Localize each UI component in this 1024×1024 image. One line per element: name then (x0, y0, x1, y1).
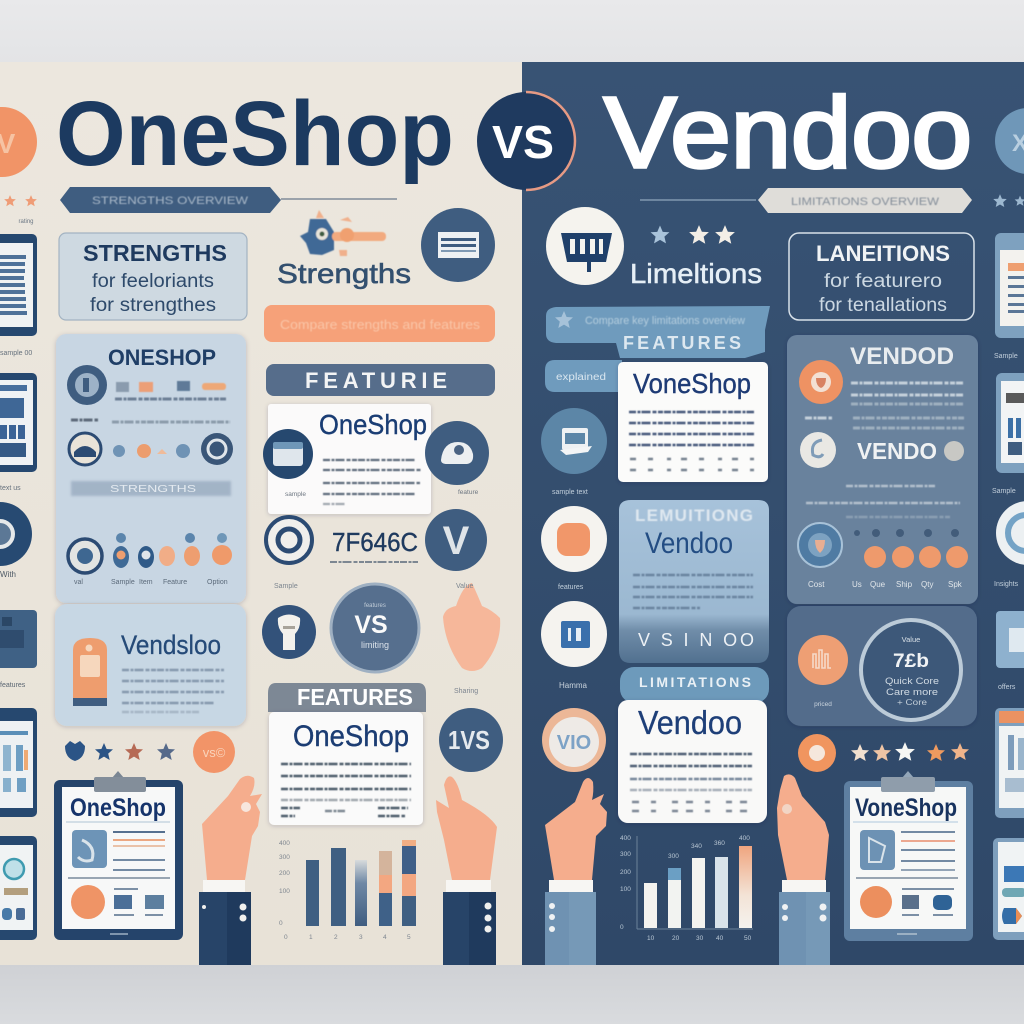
bar chart: Vendoo: 0 (620, 924, 624, 931)
icon: VIO ring (542, 708, 606, 772)
thumbnail (72, 830, 107, 868)
bar chart: OneShop: 100 (279, 888, 290, 895)
phone 4 (995, 708, 1024, 818)
small label: features (558, 584, 584, 591)
icon: VIO ring: VIO (557, 732, 591, 754)
feature card: Vendoo (618, 700, 767, 823)
icon: orange hand circle (798, 635, 848, 685)
stat ring (861, 620, 961, 720)
bar chart: Vendoo: 300 (668, 853, 679, 860)
thumbnail (860, 830, 895, 870)
phone 3 (996, 611, 1024, 668)
phone 5 (993, 838, 1024, 940)
feature card: OneShop (268, 404, 431, 514)
axis labels: Feature (163, 579, 187, 586)
axis labels: Option (207, 579, 228, 586)
limitations box: for tenallations (819, 295, 947, 316)
features heading bar (268, 683, 426, 712)
pin row (113, 533, 232, 568)
small label: Hamma (559, 681, 588, 690)
panel: Vendoo stat (787, 606, 977, 726)
phone label 4: features (0, 682, 26, 689)
phone label 1: sample 00 (0, 350, 32, 357)
bar chart: Vendoo: 100 (620, 886, 631, 893)
bar chart: OneShop: 3 (359, 934, 363, 941)
orange banner (264, 305, 495, 342)
bar chart: Vendoo: 10 (647, 935, 655, 942)
bar chart: Vendoo: 50 (744, 935, 752, 942)
divider band: STRENGTHS (110, 484, 196, 495)
hand: left blue sleeve (545, 778, 607, 965)
icon: document circle (421, 208, 495, 282)
phone 1 (995, 233, 1024, 338)
stat ring: Quick Core (885, 676, 939, 686)
ring icon (0, 502, 32, 566)
icon: orange badge left edge (0, 107, 37, 177)
bar chart: OneShop: 0 (279, 920, 283, 927)
phone 5 (0, 708, 37, 817)
mini icon row (71, 381, 230, 422)
icon: circle C (201, 433, 233, 465)
bar chart: OneShop (279, 840, 416, 941)
bar chart: OneShop: 300 (279, 854, 290, 861)
panel: limitations blue (619, 500, 769, 663)
feature card: VoneShop (618, 362, 768, 482)
stat ring: Value (902, 635, 920, 644)
clipboard: OneShop (54, 771, 183, 940)
strengths box: for strengthes (90, 295, 216, 316)
icon: small badge (944, 441, 964, 461)
feature card: OneShop: OneShop (319, 409, 427, 440)
phone 4 (0, 610, 37, 668)
mini tiles (902, 888, 954, 916)
panel: OneShop side background (0, 62, 522, 965)
feature banner (266, 364, 495, 396)
subtitle pill: Vendoo: LIMITATIONS OVERVIEW (791, 196, 940, 208)
axis labels: Sample (111, 579, 135, 586)
icon: V circle: V (443, 519, 470, 563)
icon: raised hand (443, 583, 500, 671)
icon: white circle blue square (541, 601, 607, 667)
small label: sample text (552, 489, 588, 496)
phone label 4: offers (998, 684, 1016, 691)
ring icon (996, 501, 1024, 565)
panel axis labels: Ship (896, 580, 913, 589)
phone label 1: Sample (994, 353, 1018, 360)
small labels top of hand (274, 583, 478, 695)
bar chart: Vendoo: 400 (620, 835, 631, 842)
bar chart: OneShop: 400 (279, 840, 290, 847)
orange dot row (864, 546, 968, 568)
panel: Vendod detail (787, 335, 978, 604)
icon: V circle (425, 509, 487, 571)
panel axis labels: Cost (808, 580, 825, 589)
icon: strengths gear and key (300, 210, 386, 256)
icon: 1VS circle: 1VS (448, 725, 490, 755)
feature banner: FEATURIE (305, 368, 447, 393)
blue ribbon banner: Compare key limitations overview (585, 315, 745, 327)
bar chart: Vendoo: 20 (672, 935, 680, 942)
feature card: OneShop lower: OneShop (293, 720, 409, 753)
small label: features (285, 489, 479, 498)
bar chart: Vendoo: 200 (620, 869, 631, 876)
divider band (71, 481, 231, 496)
orange banner: Compare strengths and features (280, 317, 481, 332)
feature card: Vendoo: Vendoo (638, 704, 742, 741)
icon: small orange stars left edge (4, 195, 37, 225)
icon: ring logo (266, 517, 312, 563)
icon: circle B (69, 433, 101, 465)
hand holding card: right navy (436, 776, 497, 965)
icon: 1VS circle (439, 708, 503, 772)
blue ribbon banner (546, 306, 770, 358)
icon: circle D (68, 539, 102, 573)
panel axis labels: Us (852, 580, 862, 589)
bar chart: OneShop: 2 (334, 934, 338, 941)
axis labels: val (74, 579, 83, 586)
icon: shoe circle (425, 421, 489, 485)
title: OneShop: OneShop (56, 83, 454, 185)
strengths box (59, 233, 247, 320)
stat ring: 7£b (893, 651, 929, 672)
phone label 2: Sample (992, 488, 1016, 495)
subtitle pill: OneShop (60, 187, 397, 213)
icon: orange blob (193, 731, 235, 773)
small labels top of hand: Sample (274, 583, 298, 590)
bar chart: OneShop: 0 (284, 934, 288, 941)
icon: bulb circle (262, 605, 316, 659)
panel: Vendsloo (55, 604, 246, 726)
limitations box (789, 233, 974, 320)
icon: white swirl circle (800, 432, 836, 468)
strengths box: STRENGTHS (83, 240, 227, 266)
bar chart: OneShop: 5 (407, 934, 411, 941)
panel: Vendoo stat: priced (814, 701, 832, 708)
icon: orange swirl coin (798, 734, 836, 772)
small label: features: feature (458, 489, 479, 496)
VS centre badge: VS (492, 116, 554, 168)
hex colour label: 7F646C (332, 527, 418, 557)
feature card: VoneShop: VoneShop (633, 368, 751, 399)
small labels top of hand: Value (456, 583, 473, 590)
side cards: left edge (0, 234, 37, 940)
bar chart: OneShop: 4 (383, 934, 387, 941)
small blue pill: explained (556, 372, 606, 383)
icon: white circle orange blob (541, 506, 607, 572)
logo circle (71, 885, 105, 919)
limitations box: for featurero (824, 271, 942, 292)
logo circle (860, 886, 892, 918)
small blue pill (545, 360, 622, 392)
icon: blue shield circle (798, 523, 842, 567)
axis labels (74, 579, 228, 586)
axis labels: Item (139, 579, 153, 586)
bar chart: Vendoo (620, 835, 753, 942)
icon: small orange stars left edge: rating (18, 219, 34, 225)
icon: laptop circle (541, 408, 607, 474)
stat ring: Care more (886, 687, 938, 697)
stat ring: + Core (897, 698, 928, 707)
panel axis labels (808, 580, 963, 589)
clipboard: VoneShop (844, 771, 973, 941)
clipboard: VoneShop: VoneShop (855, 794, 957, 822)
panel: Vendsloo: Vendsloo (121, 630, 221, 660)
small labels top of hand: Sharing (454, 688, 478, 695)
bar chart: OneShop: 1 (309, 934, 313, 941)
bar chart: Vendoo: 400 (739, 835, 750, 842)
panel: Vendoo side background (522, 62, 1024, 965)
panel: OneShop detail: ONESHOP (108, 345, 216, 370)
panel: limitations blue: V S I N OO (638, 630, 754, 650)
panel: Vendod detail: VENDOD (850, 343, 954, 370)
star cluster: Vendoo heading (651, 225, 735, 244)
subtitle pill: Vendoo (640, 188, 972, 213)
feature card: OneShop lower (269, 712, 423, 825)
clipboard: OneShop: OneShop (70, 794, 166, 822)
features heading bar: FEATURES (297, 684, 413, 710)
phone 2 (996, 373, 1024, 473)
icon: orange blob: vs© (203, 745, 226, 760)
phone 2 (0, 373, 37, 472)
strengths box: for feeloriants (92, 271, 214, 292)
icon: orange shield circle (799, 360, 843, 404)
icon: small stars right edge (993, 194, 1024, 207)
panel: Vendod detail: VENDO (857, 438, 937, 464)
bar chart: Vendoo: 40 (716, 935, 724, 942)
VS ring badge: limiting (361, 640, 389, 650)
panel axis labels: Que (870, 580, 886, 589)
mini pins row (113, 444, 190, 458)
VS ring badge: VS (354, 611, 388, 639)
hand: right blue sleeve (777, 774, 830, 965)
side cards: right edge (992, 233, 1024, 940)
VS ring badge (331, 584, 419, 672)
mid lines (806, 486, 960, 517)
bar chart: Vendoo: 360 (714, 840, 725, 847)
icon: circle A (67, 365, 107, 405)
panel: OneShop detail (56, 334, 246, 603)
phone label 3: With (0, 570, 16, 579)
icon: blue badge right edge (995, 108, 1024, 174)
phone label 3: Insights (994, 581, 1019, 588)
icon: cart circle (546, 207, 624, 285)
heading: Limeltions: Limeltions (630, 258, 762, 289)
caption lines (76, 510, 222, 512)
panel: limitations blue: Vendoo (645, 527, 733, 560)
subtitle pill: OneShop: STRENGTHS OVERVIEW (92, 195, 249, 207)
small label: features: sample (285, 491, 306, 498)
limitations pill (620, 667, 769, 703)
panel axis labels: Spk (948, 580, 963, 589)
phone label 2: text us (0, 485, 21, 492)
panel: limitations blue: LEMUITIONG (635, 506, 753, 525)
blue ribbon banner: FEATURES (623, 333, 741, 353)
title: Vendoo: Vendoo (604, 77, 972, 189)
VS centre badge (477, 92, 575, 190)
limitations pill: LIMITATIONS (639, 674, 751, 690)
star rating: Vendoo (851, 742, 969, 761)
bar chart: OneShop: 200 (279, 870, 290, 877)
bar chart: Vendoo: 340 (691, 843, 702, 850)
heading: Strengths: Strengths (277, 258, 411, 289)
panel axis labels: Qty (921, 580, 933, 589)
detail lines (805, 383, 964, 428)
icon: browser circle (263, 429, 313, 479)
bar chart: Vendoo: 30 (696, 935, 704, 942)
star rating: OneShop (65, 741, 175, 761)
phone 1 (0, 234, 37, 336)
phone 6 (0, 836, 37, 940)
bar chart: Vendoo: 300 (620, 851, 631, 858)
hand holding card: left navy (199, 776, 262, 965)
icon: price tag (73, 638, 107, 706)
VS ring badge: features (364, 603, 386, 609)
mini tiles (114, 888, 164, 916)
limitations box: LANEITIONS (816, 241, 950, 266)
